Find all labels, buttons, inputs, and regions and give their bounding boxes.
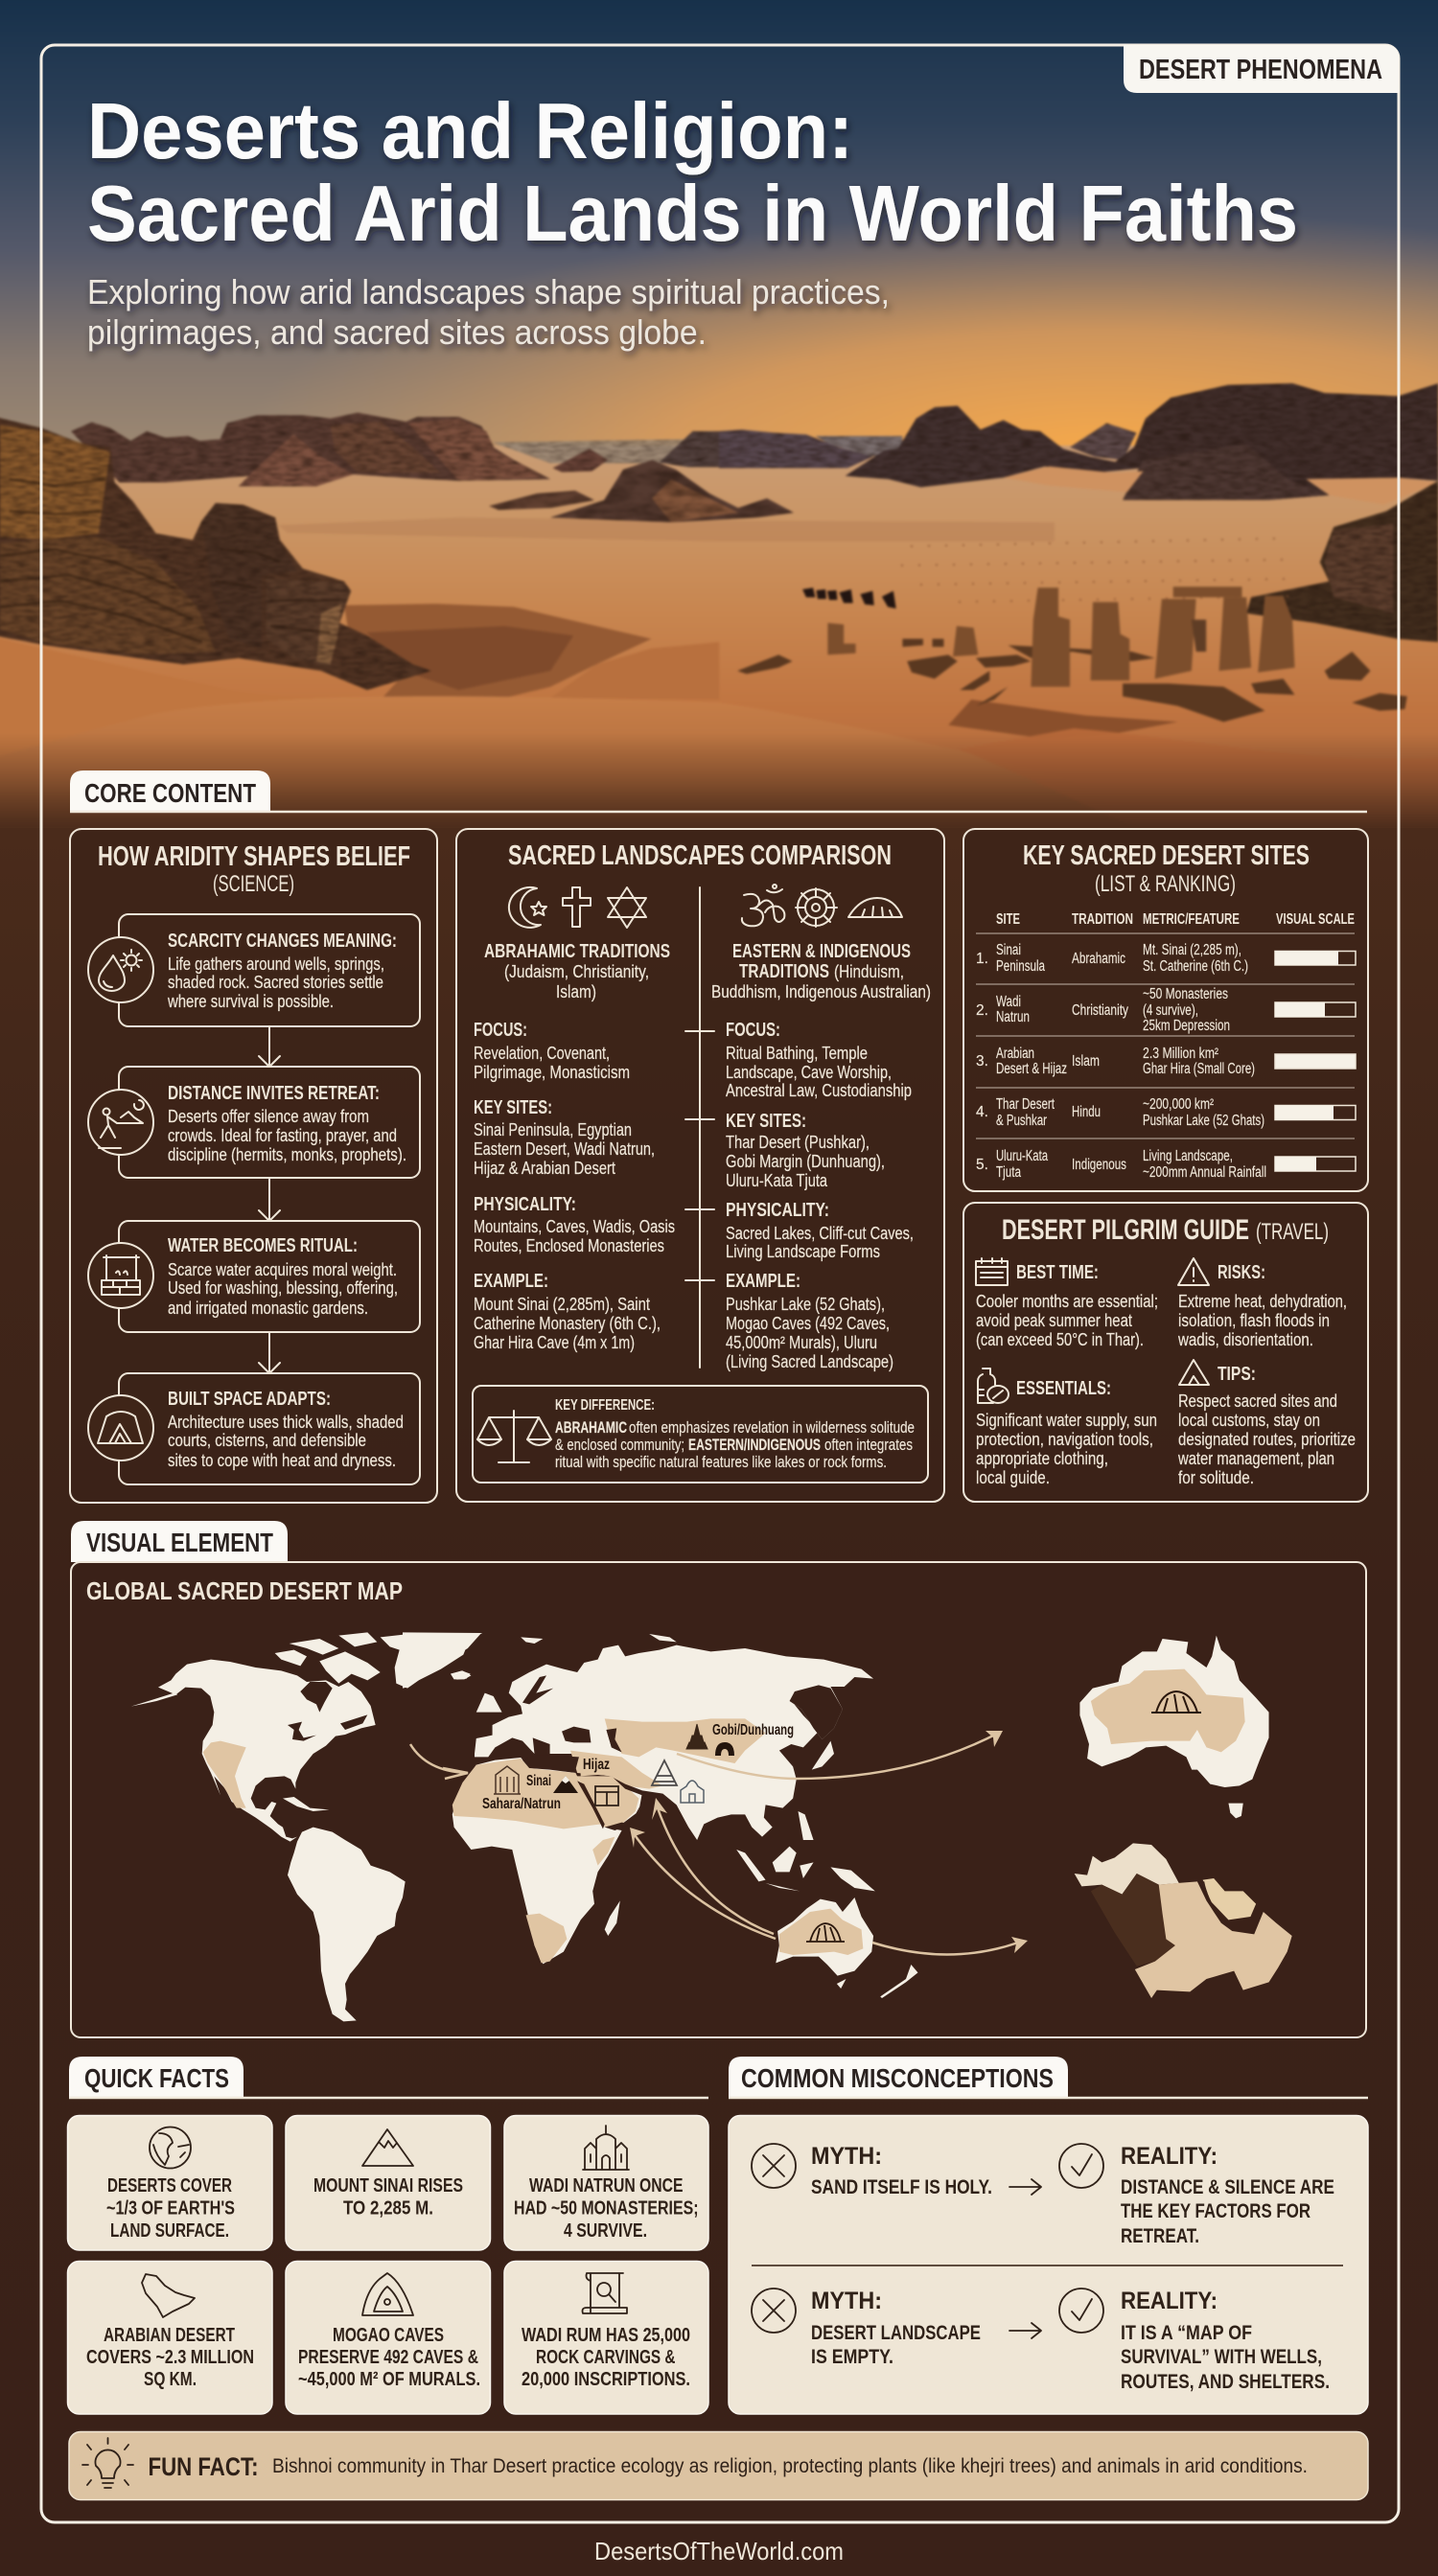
quick fact card: Wadi Rum: ROCK CARVINGS &: [536, 2347, 675, 2368]
table header: VISUAL SCALE: [1276, 911, 1355, 928]
abrahamic column text: Revelation, Covenant,: [474, 1044, 610, 1063]
myth 1: SAND ITSELF IS HOLY.: [811, 2176, 992, 2198]
eastern column text: Pushkar Lake (52 Ghats),: [726, 1295, 885, 1314]
step 4 box: Architecture uses thick walls, shaded: [168, 1413, 404, 1432]
icon: Uluru on main map: [806, 1923, 845, 1942]
abrahamic column text: Sinai Peninsula, Egyptian: [474, 1120, 632, 1139]
eastern column heading: (Hinduism,: [834, 962, 904, 981]
step 3 box: [88, 1221, 420, 1332]
section tab: visual element: VISUAL ELEMENT: [86, 1528, 273, 1557]
myth 1: MYTH:: [811, 2143, 882, 2170]
section tab: core content: CORE CONTENT: [84, 778, 256, 808]
step 1 box: shaded rock. Sacred stories settle: [168, 973, 383, 992]
map labels and site icons: Gobi/Dunhuang: [712, 1722, 794, 1738]
reality 2: ROUTES, AND SHELTERS.: [1121, 2371, 1330, 2393]
eastern column text: Uluru-Kata Tjuta: [726, 1171, 828, 1190]
step 3 box: and irrigated monastic gardens.: [168, 1299, 368, 1318]
ancient ruins: [737, 586, 1407, 738]
left distant mesas: [71, 413, 719, 486]
myth 2: MYTH:: [811, 2288, 882, 2314]
eastern column text: (Living Sacred Landscape): [726, 1352, 893, 1371]
abrahamic column text: Eastern Desert, Wadi Natrun,: [474, 1139, 655, 1159]
abrahamic column text: Mount Sinai (2,285m), Saint: [474, 1295, 650, 1314]
step 1 box: Life gathers around wells, springs,: [168, 954, 384, 974]
row 5: [976, 1148, 1356, 1181]
row 2: 2.: [976, 1002, 988, 1019]
fun fact banner: FUN FACT:: [148, 2452, 259, 2481]
best time: [976, 1258, 1158, 1349]
abrahamic column heading: ABRAHAMIC TRADITIONS: [484, 941, 670, 962]
reality 1: REALITY:: [1121, 2143, 1218, 2170]
section tab: quick facts: [69, 2057, 708, 2098]
quick fact card: Wadi Natrun: [504, 2116, 708, 2250]
subtitle: Exploring how arid landscapes shape spiritual practices,: [87, 272, 890, 311]
best time: avoid peak summer heat: [976, 1311, 1132, 1330]
quick fact card: Arabian Desert: [67, 2262, 272, 2414]
eastern column text: KEY SITES:: [726, 1111, 806, 1132]
panel heading: [1023, 840, 1310, 897]
central small mesa: [489, 460, 794, 522]
risks: wadis, disorientation.: [1177, 1330, 1313, 1349]
panel: sacred landscapes comparison: [456, 829, 944, 1502]
table header: TRADITION: [1072, 911, 1133, 928]
hero image: desert landscape at sunset: [0, 0, 1438, 834]
step 4 box: BUILT SPACE ADAPTS:: [168, 1389, 331, 1410]
step 3 box: WATER BECOMES RITUAL:: [168, 1235, 358, 1256]
panel heading: (SCIENCE): [213, 871, 294, 897]
icons: om, dharma wheel, Uluru: [742, 885, 902, 927]
panel heading: SACRED LANDSCAPES COMPARISON: [508, 840, 892, 871]
row 4: 4.: [976, 1104, 988, 1120]
quick fact card: Wadi Natrun: HAD ~50 MONASTERIES;: [514, 2198, 698, 2220]
ground specks: [901, 539, 1304, 602]
arrow: [1009, 2323, 1041, 2338]
title: Sacred Arid Lands in World Faiths: [87, 169, 1298, 258]
arrow: [259, 1178, 280, 1221]
eastern column text: FOCUS:: [726, 1020, 780, 1041]
center divider with ticks: [685, 887, 714, 1368]
reality 2: IT IS A “MAP OF: [1121, 2322, 1252, 2344]
sand plain: [0, 446, 1438, 834]
step 2 box: DISTANCE INVITES RETREAT:: [168, 1083, 380, 1104]
eastern column heading: TRADITIONS: [739, 961, 829, 982]
row 2: 25km Depression: [1143, 1018, 1230, 1034]
myth 2: IS EMPTY.: [811, 2346, 893, 2368]
step 4 box: courts, cisterns, and defensible: [168, 1431, 366, 1450]
row 3: [976, 1046, 1356, 1077]
quick fact card: Wadi Natrun: 4 SURVIVE.: [564, 2220, 647, 2242]
essentials: appropriate clothing,: [976, 1449, 1108, 1468]
essentials: local guide.: [976, 1468, 1050, 1487]
row 2: Natrun: [996, 1009, 1030, 1025]
quick fact card: deserts cover: ~1/3 OF EARTH'S: [106, 2198, 235, 2220]
best time: BEST TIME:: [1016, 1262, 1099, 1283]
category badge: [1124, 45, 1399, 93]
eastern column text: Ritual Bathing, Temple: [726, 1044, 868, 1063]
row 3: Islam: [1072, 1053, 1100, 1070]
quick fact card: deserts cover: [67, 2116, 272, 2250]
essentials: Significant water supply, sun: [976, 1411, 1157, 1430]
abrahamic column heading: Islam): [556, 982, 596, 1001]
shadow bowl dune: [344, 604, 719, 700]
eastern column text: [726, 1020, 914, 1371]
myth 2: DESERT LANDSCAPE: [811, 2322, 981, 2344]
arrow: [1009, 2179, 1041, 2195]
abrahamic column text: Ghar Hira Cave (4m x 1m): [474, 1333, 635, 1352]
icon: Uluru on enlarged Australia: [1151, 1691, 1201, 1713]
panel: myths and realities: [729, 2116, 1368, 2414]
quick fact card: Mogao Caves: MOGAO CAVES: [333, 2325, 444, 2346]
reality 1: [1059, 2143, 1334, 2247]
section tab: common misconceptions: COMMON MISCONCEPTIONS: [741, 2063, 1054, 2093]
risks: Extreme heat, dehydration,: [1178, 1292, 1347, 1311]
row 3: 3.: [976, 1053, 988, 1070]
tips: designated routes, prioritize: [1178, 1430, 1356, 1449]
map: the Americas and Greenland: [131, 1632, 482, 2021]
tips: [1177, 1360, 1356, 1487]
row 5: Living Landscape,: [1143, 1148, 1233, 1164]
panel: how aridity shapes belief: [70, 829, 437, 1503]
eastern column text: Gobi Margin (Dunhuang),: [726, 1152, 885, 1171]
reality 1: RETREAT.: [1121, 2225, 1199, 2247]
quick fact card: Arabian Desert: ARABIAN DESERT: [104, 2325, 235, 2346]
title: Deserts and Religion:: [87, 86, 853, 175]
best time: (can exceed 50°C in Thar).: [976, 1330, 1144, 1349]
map: enlarged Arabia inset: [1075, 1843, 1292, 1998]
reality 2: SURVIVAL” WITH WELLS,: [1121, 2346, 1322, 2368]
row 4: Pushkar Lake (52 Ghats): [1143, 1113, 1264, 1129]
myth 1: [752, 2143, 992, 2198]
map: enlarged Australia inset: [1079, 1636, 1269, 1818]
tips: TIPS:: [1218, 1364, 1256, 1385]
quick fact card: deserts cover: DESERTS COVER: [107, 2175, 232, 2196]
row 1: [976, 942, 1356, 975]
map labels and site icons: [482, 1722, 794, 1812]
abrahamic column text: Pilgrimage, Monasticism: [474, 1063, 630, 1082]
row 1: 1.: [976, 951, 988, 967]
quick fact card: Wadi Natrun: WADI NATRUN ONCE: [529, 2175, 683, 2196]
row 2: [976, 986, 1356, 1034]
essentials: [976, 1368, 1157, 1487]
row 1: St. Catherine (6th C.): [1143, 958, 1248, 975]
row 4: ~200,000 km²: [1143, 1096, 1214, 1113]
row 5: Tjuta: [996, 1164, 1021, 1181]
abrahamic column text: KEY SITES:: [474, 1097, 552, 1118]
essentials: ESSENTIALS:: [1016, 1378, 1111, 1399]
table header: [996, 911, 1355, 928]
step 2 box: Deserts offer silence away from: [168, 1107, 369, 1126]
essentials: protection, navigation tools,: [976, 1430, 1153, 1449]
abrahamic column heading: (Judaism, Christianity,: [504, 962, 649, 981]
step 2 box: [88, 1067, 420, 1178]
row 2: Christianity: [1072, 1002, 1128, 1019]
eastern column heading: EASTERN & INDIGENOUS: [732, 941, 911, 962]
row 3: Desert & Hijaz: [996, 1061, 1067, 1077]
step 1 box: SCARCITY CHANGES MEANING:: [168, 931, 397, 952]
mid-distance shadow band: [278, 518, 1055, 541]
reality 2: [1059, 2288, 1330, 2393]
abrahamic column text: [474, 1020, 675, 1352]
step 4 box: [88, 1373, 420, 1484]
row 2: Wadi: [996, 994, 1021, 1010]
arrow: [259, 1026, 280, 1067]
key difference callout: & enclosed community;: [555, 1437, 684, 1454]
eastern column text: PHYSICALITY:: [726, 1200, 829, 1221]
eastern column text: 45,000m² Murals), Uluru: [726, 1333, 877, 1352]
sunset glow: [0, 192, 1438, 470]
myth 2: [752, 2288, 981, 2368]
tips: local customs, stay on: [1178, 1411, 1320, 1430]
table header: SITE: [996, 911, 1020, 928]
arrow: Atlantic to Sahara: [410, 1744, 468, 1779]
quick fact card: Wadi Rum: WADI RUM HAS 25,000: [522, 2325, 690, 2346]
subtitle: [87, 272, 890, 352]
map: Eurasia, Africa and Australia: [403, 1632, 917, 1998]
panel heading: DESERT PILGRIM GUIDE: [1002, 1214, 1249, 1246]
risks: RISKS:: [1218, 1262, 1265, 1283]
tips: water management, plan: [1177, 1449, 1334, 1468]
row 1: Sinai: [996, 942, 1021, 958]
row 1: Peninsula: [996, 958, 1045, 975]
panel heading: (LIST & RANKING): [1095, 871, 1236, 897]
step 1 box: where survival is possible.: [167, 992, 334, 1011]
row 5: ~200mm Annual Rainfall: [1143, 1164, 1266, 1181]
abrahamic column text: Routes, Enclosed Monasteries: [474, 1236, 664, 1255]
reality 1: DISTANCE & SILENCE ARE: [1121, 2176, 1334, 2198]
row 3: Ghar Hira (Small Core): [1143, 1061, 1255, 1077]
dark fade into page: [0, 733, 1438, 830]
arrow: Australia to Arabia inset: [872, 1937, 1028, 1955]
right distant ranges and mesas: [719, 383, 1438, 500]
panel: desert pilgrim guide: [963, 1203, 1368, 1502]
arrow: Australia to Thar: [652, 1798, 774, 1934]
quick fact card: Wadi Rum: 20,000 INSCRIPTIONS.: [522, 2369, 690, 2390]
eastern column text: Mogao Caves (492 Caves,: [726, 1314, 890, 1333]
panel heading: KEY SACRED DESERT SITES: [1023, 840, 1310, 871]
icon: light bulb: [82, 2438, 133, 2488]
key difference callout: often integrates: [824, 1437, 913, 1454]
key difference callout: often emphasizes revelation in wilderness solitude: [629, 1419, 915, 1437]
row 5: 5.: [976, 1157, 988, 1173]
abrahamic column text: Hijaz & Arabian Desert: [474, 1159, 615, 1178]
eastern column text: Thar Desert (Pushkar),: [726, 1133, 870, 1152]
row 5: Indigenous: [1072, 1157, 1126, 1173]
row 3: 2.3 Million km²: [1143, 1046, 1218, 1062]
quick fact card: Mount Sinai: TO 2,285 M.: [343, 2198, 433, 2220]
arrow: Australia to Arabia: [630, 1828, 776, 1939]
eastern column heading: Buddhism, Indigenous Australian): [711, 982, 931, 1001]
quick fact card: Mogao Caves: PRESERVE 492 CAVES &: [298, 2347, 478, 2368]
panel heading: HOW ARIDITY SHAPES BELIEF: [98, 841, 410, 872]
quick fact card: Mogao Caves: ~45,000 M² OF MURALS.: [298, 2369, 480, 2390]
section tab: common misconceptions: [729, 2057, 1368, 2098]
section tab: quick facts: QUICK FACTS: [84, 2063, 229, 2093]
eastern column text: Sacred Lakes, Cliff-cut Caves,: [726, 1224, 914, 1243]
right foreground rock: [1246, 481, 1438, 642]
row 4: Hindu: [1072, 1104, 1101, 1120]
foreground left rock formation: [0, 417, 431, 690]
row 4: & Pushkar: [996, 1113, 1047, 1129]
reality 1: THE KEY FACTORS FOR: [1121, 2200, 1310, 2222]
quick fact card: deserts cover: LAND SURFACE.: [110, 2220, 229, 2242]
title: [87, 86, 1298, 258]
right sand slope: [959, 728, 1438, 834]
page background: [0, 828, 1438, 2576]
table header: METRIC/FEATURE: [1143, 911, 1240, 928]
map labels and site icons: Sahara/Natrun: [482, 1796, 561, 1812]
key difference callout: [473, 1386, 928, 1483]
step 3 box: Used for washing, blessing, offering,: [168, 1278, 398, 1298]
abrahamic column text: Mountains, Caves, Wadis, Oasis: [474, 1217, 675, 1236]
row 1: Abrahamic: [1072, 951, 1125, 967]
row 3: Arabian: [996, 1046, 1034, 1062]
tips: for solitude.: [1178, 1468, 1254, 1487]
row 2: ~50 Monasteries: [1143, 986, 1228, 1002]
step 2 box: discipline (hermits, monks, prophets).: [168, 1145, 406, 1164]
key difference callout: KEY DIFFERENCE:: [555, 1397, 655, 1414]
arrow: Asia to Australia inset: [677, 1731, 1003, 1779]
abrahamic column text: PHYSICALITY:: [474, 1194, 576, 1215]
key difference callout: ABRAHAMIC: [555, 1419, 627, 1437]
key difference callout: ritual with specific natural features like lakes or rock forms.: [555, 1454, 887, 1471]
foreground dune: [0, 637, 1150, 834]
fun fact banner: [69, 2432, 1368, 2499]
row 2: (4 survive),: [1143, 1002, 1198, 1019]
quick fact card: Arabian Desert: COVERS ~2.3 MILLION: [86, 2347, 254, 2368]
step 3 box: Scarce water acquires moral weight.: [168, 1260, 397, 1279]
tips: Respect sacred sites and: [1178, 1392, 1337, 1411]
eastern column text: Ancestral Law, Custodianship: [726, 1081, 912, 1100]
sky: [0, 0, 1438, 460]
map labels and site icons: Hijaz: [583, 1757, 610, 1773]
abrahamic column text: EXAMPLE:: [474, 1271, 548, 1292]
row 5: Uluru-Kata: [996, 1148, 1048, 1164]
row 4: Thar Desert: [996, 1096, 1055, 1113]
panel heading: (TRAVEL): [1256, 1219, 1329, 1245]
panel: global sacred desert map: [71, 1562, 1366, 2037]
step 4 box: sites to cope with heat and dryness.: [168, 1451, 396, 1470]
quick fact card: Mogao Caves: [286, 2262, 491, 2414]
quick fact card: Mount Sinai: MOUNT SINAI RISES: [313, 2175, 463, 2196]
reality 2: REALITY:: [1121, 2288, 1218, 2314]
section tab: visual element: [71, 1521, 288, 1562]
category badge: DESERT PHENOMENA: [1139, 55, 1382, 85]
fun fact banner: Bishnoi community in Thar Desert practice ecology as religion, protecting plants (like khejri trees) and animals in arid conditions.: [272, 2455, 1308, 2477]
sand between right mesas: [1004, 467, 1438, 505]
icons: crescent, cross, star of David: [509, 887, 646, 928]
abrahamic column text: Catherine Monastery (6th C.),: [474, 1314, 661, 1333]
row 1: Mt. Sinai (2,285 m),: [1143, 942, 1241, 958]
footer website: DesertsOfTheWorld.com: [594, 2537, 844, 2565]
subtitle: pilgrimages, and sacred sites across globe.: [87, 312, 707, 352]
quick fact card: Mount Sinai: [286, 2116, 491, 2250]
quick fact card: Arabian Desert: SQ KM.: [144, 2369, 197, 2390]
abrahamic column heading: [484, 941, 670, 1001]
key difference callout: EASTERN/INDIGENOUS: [688, 1437, 821, 1454]
eastern column text: Living Landscape Forms: [726, 1242, 880, 1261]
panel: key sacred desert sites: [963, 829, 1368, 1191]
best time: Cooler months are essential;: [976, 1292, 1158, 1311]
quick fact card: Wadi Rum: [504, 2262, 708, 2414]
section tab: core content: [70, 770, 1367, 812]
abrahamic column text: FOCUS:: [474, 1020, 527, 1041]
eastern column heading: [711, 941, 931, 1001]
risks: isolation, flash floods in: [1178, 1311, 1330, 1330]
arrow: [259, 1332, 280, 1373]
row 4: [976, 1096, 1356, 1129]
step 1 box: [88, 914, 420, 1026]
step 2 box: crowds. Ideal for fasting, prayer, and: [168, 1126, 397, 1145]
map heading: GLOBAL SACRED DESERT MAP: [86, 1576, 403, 1605]
eastern column text: EXAMPLE:: [726, 1271, 800, 1292]
panel heading: [98, 841, 410, 897]
eastern column text: Landscape, Cave Worship,: [726, 1063, 892, 1082]
map labels and site icons: Sinai: [526, 1773, 551, 1789]
risks: [1177, 1258, 1347, 1349]
